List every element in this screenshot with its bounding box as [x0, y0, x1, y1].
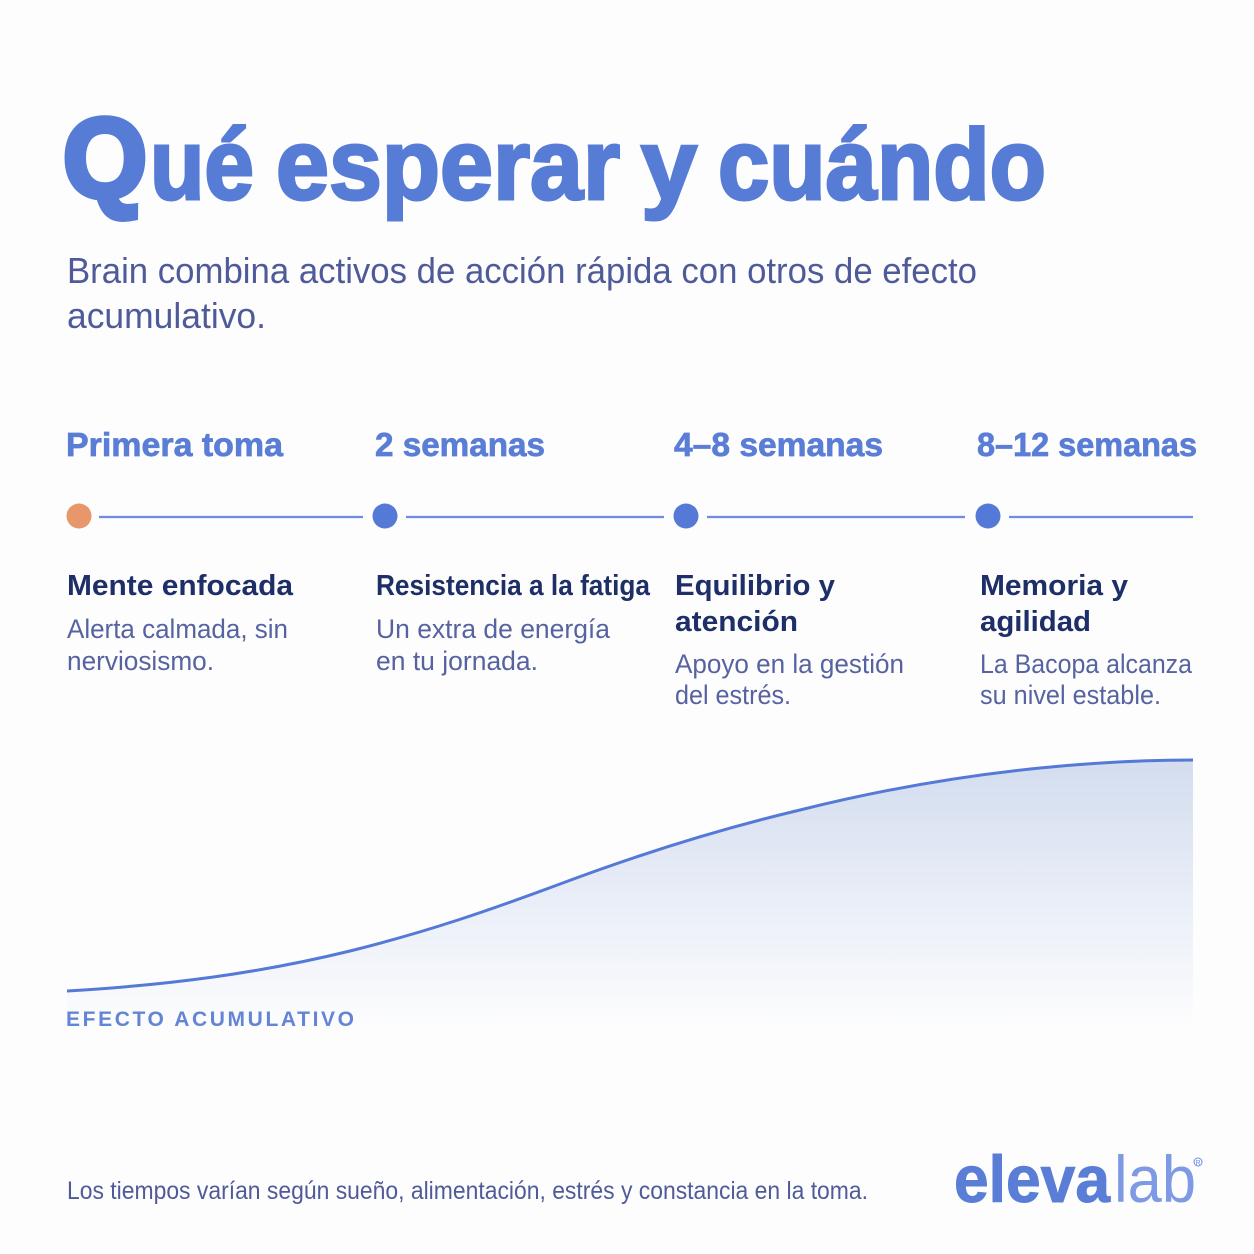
title [63, 96, 1046, 221]
stage 4: 8-12 semanas: su nivel estable. [980, 680, 1161, 710]
stage 3: 4-8 semanas: Equilibrio y [675, 570, 835, 602]
stage 2: 2 semanas: 2 semanas [375, 426, 545, 463]
subtitle: Brain combina activos de acción rápida con otros de efecto [67, 250, 977, 291]
stage 3: 4-8 semanas [674, 426, 965, 710]
title: cuándo [718, 109, 1046, 221]
stage 3: 4-8 semanas: atención [675, 606, 798, 638]
cumulative effect chart [66, 760, 1193, 1031]
stage 1: primera toma: Primera toma [66, 426, 284, 463]
stage 3: 4-8 semanas: 4–8 semanas [674, 426, 883, 463]
logo: elevalab: eleva [954, 1142, 1111, 1216]
stage 4: 8-12 semanas: Memoria y [980, 570, 1128, 602]
stage 4: 8-12 semanas: La Bacopa alcanza [980, 649, 1193, 679]
title: ué [150, 109, 254, 221]
footnote: Los tiempos varían según sueño, alimentación, estrés y constancia en la toma. [67, 1177, 868, 1205]
title: esperar [276, 109, 620, 221]
subtitle: acumulativo. [67, 295, 266, 336]
stage 3: 4-8 semanas: Apoyo en la gestión [675, 649, 904, 679]
stage 2: 2 semanas: en tu jornada. [376, 646, 538, 676]
chart label: EFECTO ACUMULATIVO [66, 1008, 354, 1031]
subtitle [67, 250, 977, 336]
stage 1: primera toma: Alerta calmada, sin [67, 614, 288, 644]
title: y [641, 109, 697, 221]
stage 4: 8-12 semanas: 8–12 semanas [977, 426, 1197, 463]
timeline [66, 426, 1197, 710]
stage 1: primera toma [66, 426, 363, 676]
logo: elevalab [954, 1142, 1202, 1216]
stage 3: 4-8 semanas: del estrés. [675, 680, 791, 710]
stage 1: primera toma: nerviosismo. [67, 646, 214, 676]
stage 2: 2 semanas: Resistencia a la fatiga [376, 570, 651, 602]
stage 2: 2 semanas: Un extra de energía [376, 614, 611, 644]
stage 4: 8-12 semanas: agilidad [980, 606, 1091, 638]
logo: elevalab: lab [1114, 1142, 1196, 1216]
logo: elevalab: R [1195, 1160, 1201, 1167]
stage 1: primera toma: Mente enfocada [67, 570, 294, 602]
stage 4: 8-12 semanas [976, 426, 1197, 710]
title: Q [63, 96, 147, 221]
stage 2: 2 semanas [372, 426, 664, 676]
